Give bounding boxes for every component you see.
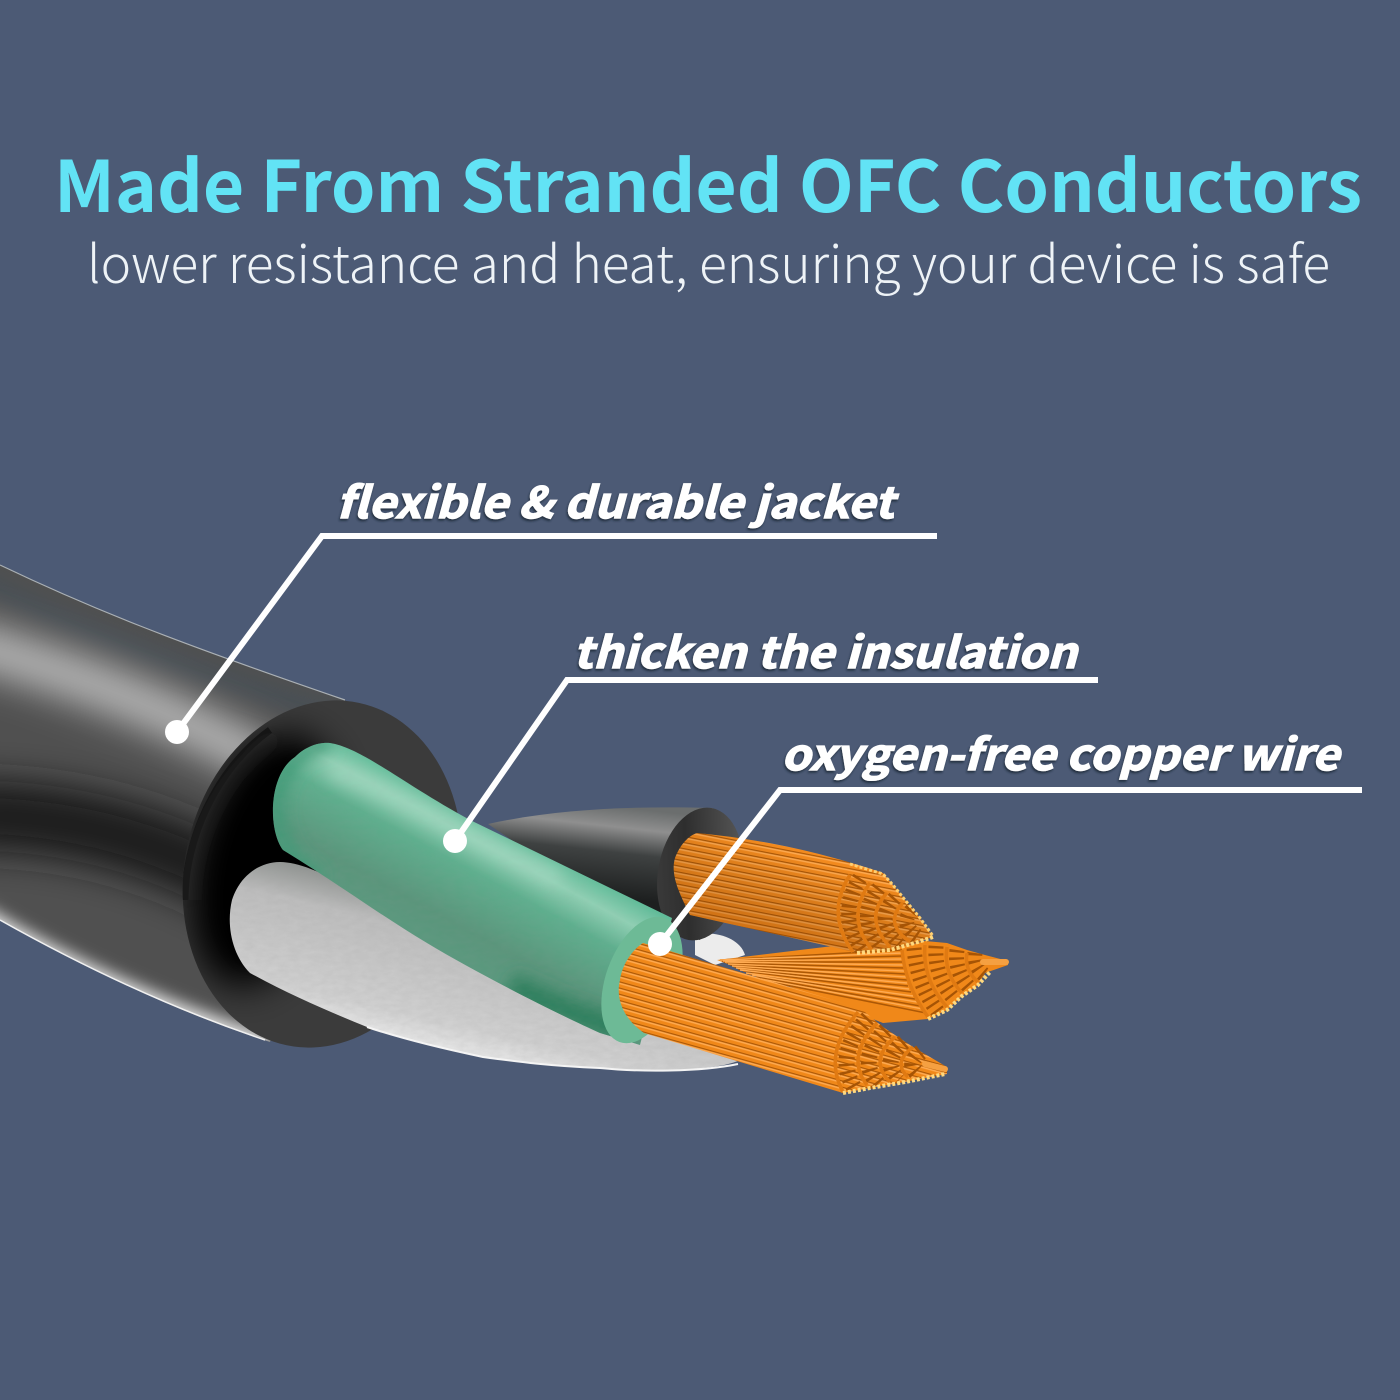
copper strands: upper conductor — [674, 833, 933, 953]
callout text: insulation: thicken the insulation — [573, 619, 1080, 681]
title: Made From Stranded OFC Conductors — [54, 131, 1362, 233]
callout text: copper: oxygen-free copper wire — [781, 721, 1343, 783]
jacket end ring — [182, 700, 458, 1048]
callout: flexible and durable jacket — [165, 469, 937, 744]
green insulated wire — [273, 743, 698, 1054]
white insulated wire — [230, 862, 740, 1071]
leader line: copper — [648, 790, 1362, 956]
white wire rear end — [695, 934, 745, 965]
leader line: jacket — [165, 536, 937, 744]
cable illustration — [0, 565, 1008, 1093]
black insulated wire — [488, 801, 753, 947]
callout: oxygen-free copper wire — [648, 721, 1362, 956]
subtitle: lower resistance and heat, ensuring your device is safe — [87, 223, 1330, 298]
callout: thicken the insulation — [443, 619, 1098, 853]
outer jacket — [0, 565, 380, 1045]
copper strands: lower conductor — [619, 943, 947, 1093]
callout text: jacket: flexible & durable jacket — [336, 469, 899, 531]
copper strands: middle conductor — [717, 941, 1008, 1023]
leader line: insulation — [443, 680, 1098, 853]
